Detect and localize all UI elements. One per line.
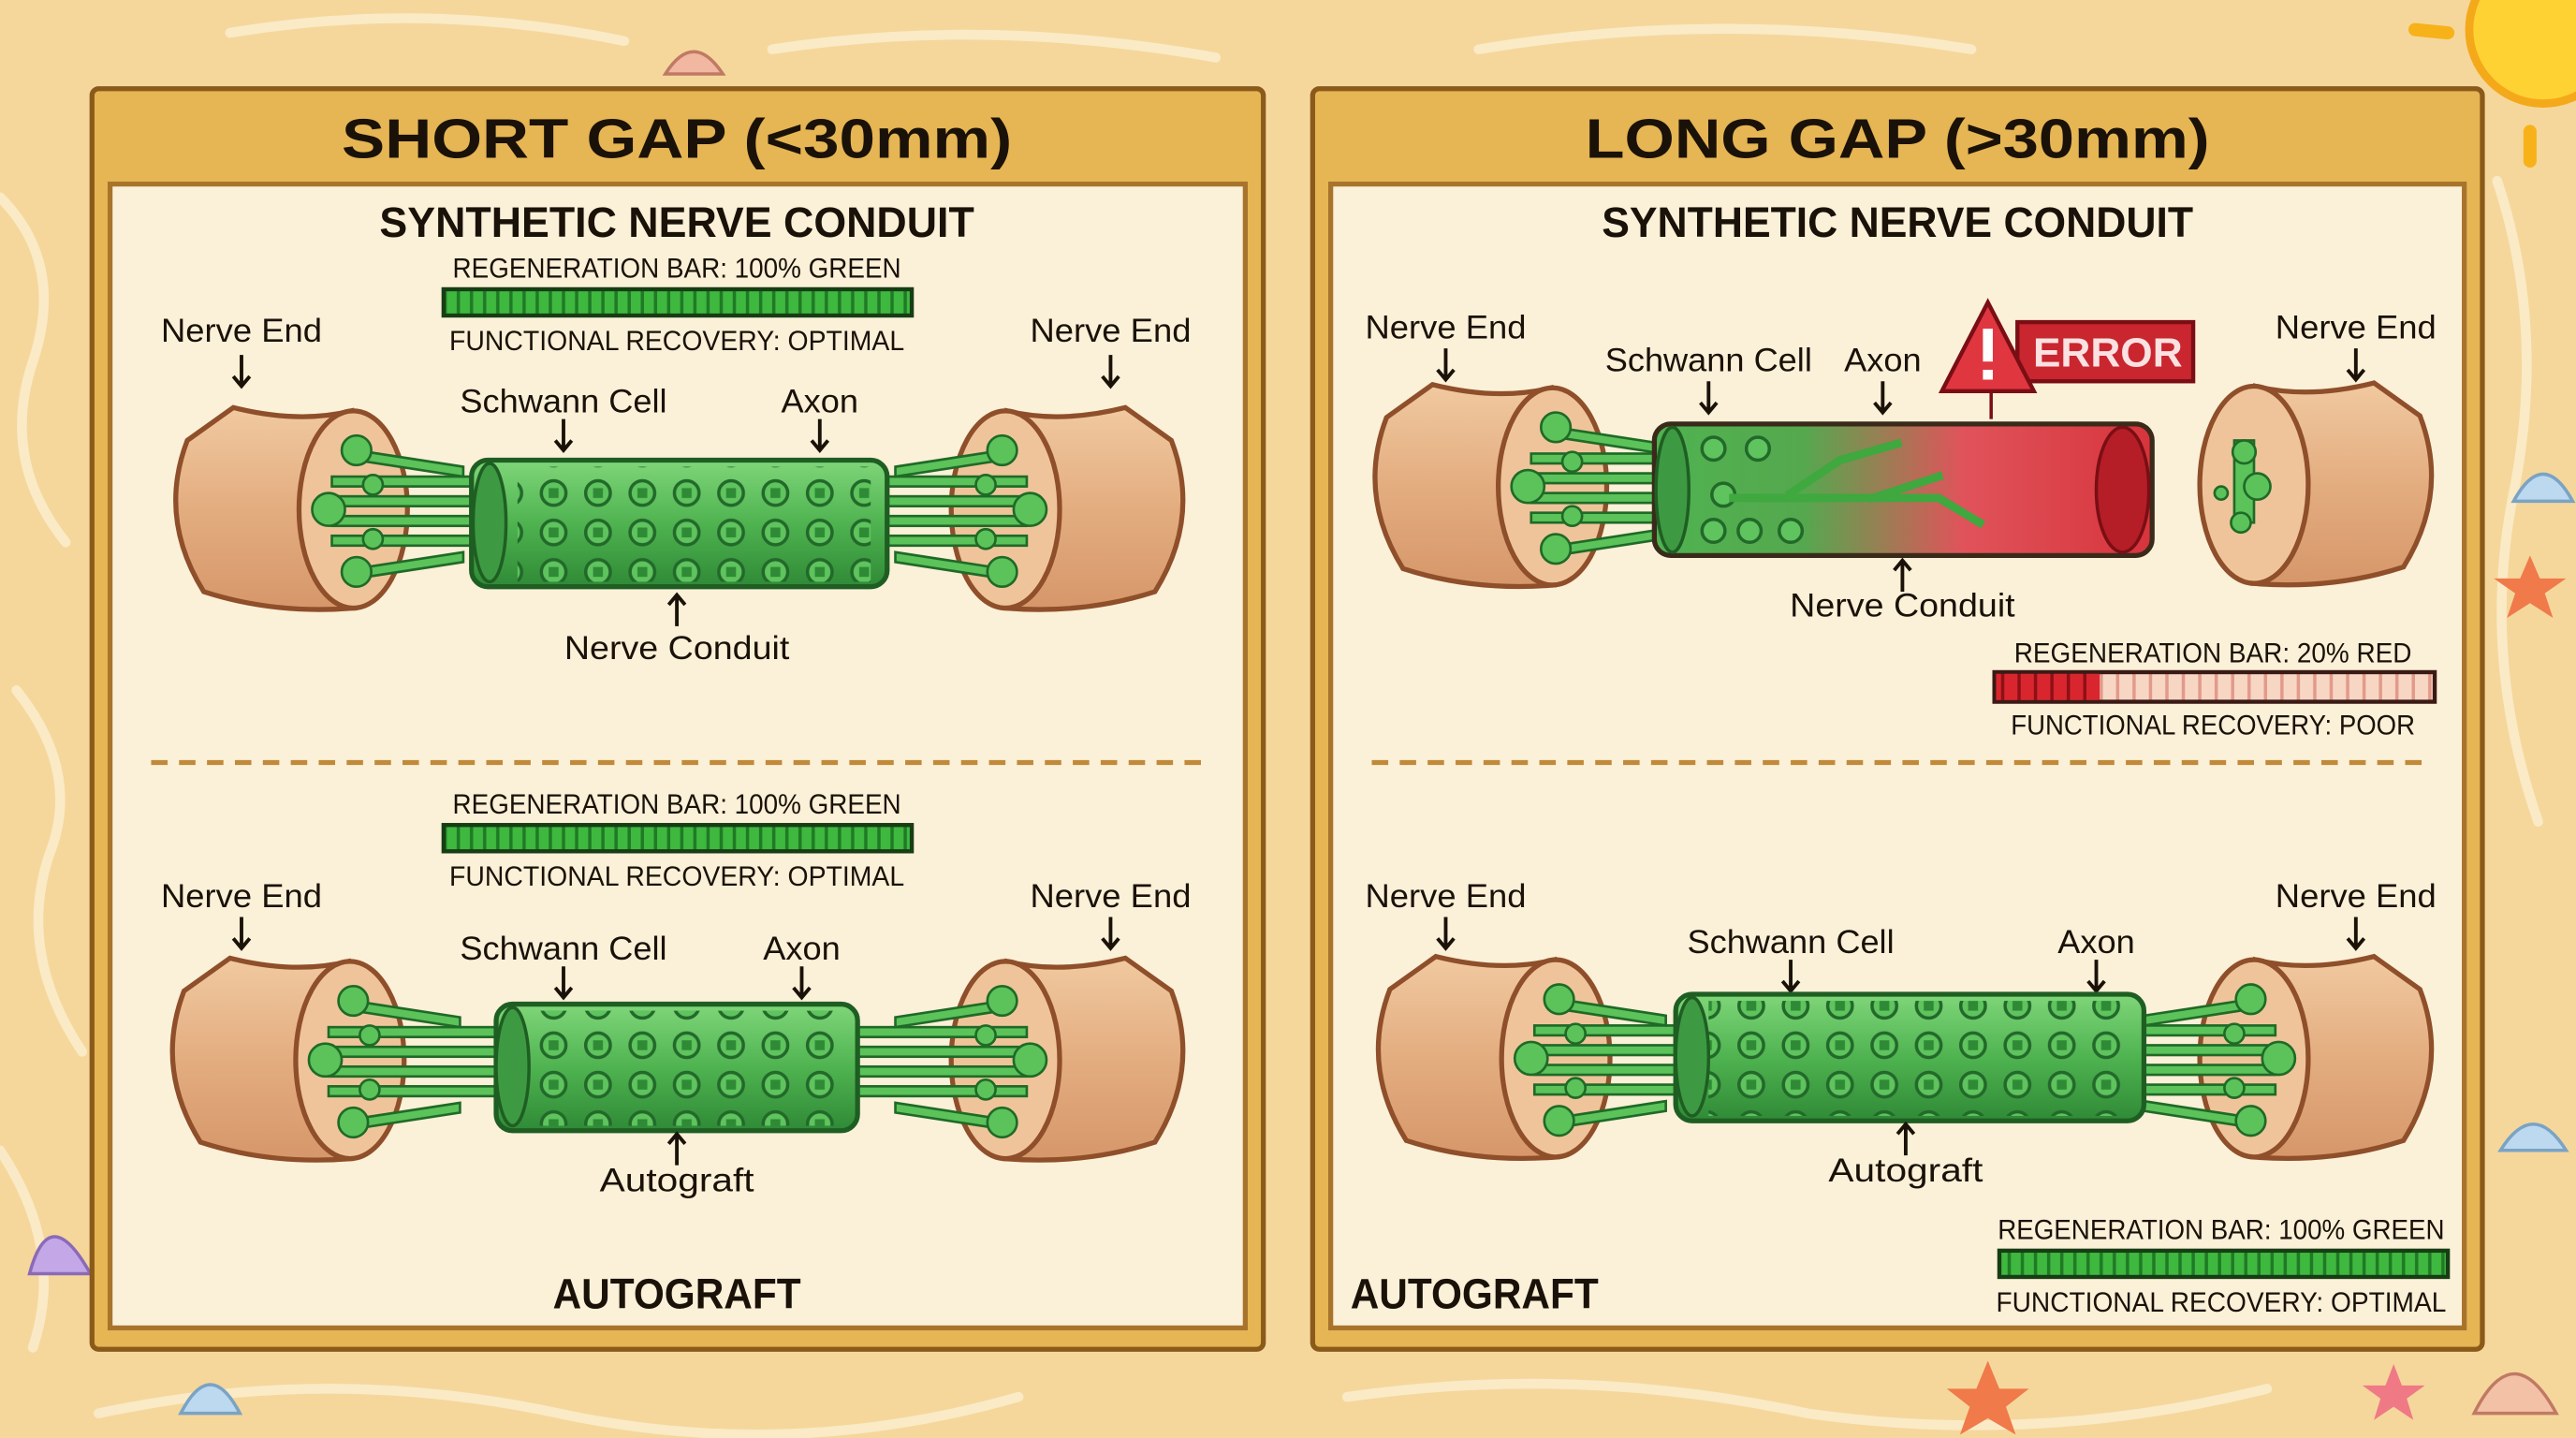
icon: sun: [2415, 0, 2576, 161]
heading: long gap: LONG GAP (>30mm): [1586, 108, 2210, 170]
section: autograft short: Axon: [763, 931, 841, 967]
panel: long gap: [1312, 89, 2482, 1349]
section: synthetic conduit long: Nerve End: [2276, 310, 2437, 346]
section: autograft long: FUNCTIONAL RECOVERY: OPTIMAL: [1996, 1287, 2446, 1318]
section: autograft short: Nerve End: [161, 878, 322, 915]
section: autograft short: FUNCTIONAL RECOVERY: OPTIMAL: [449, 861, 904, 892]
section: synthetic conduit short: [161, 198, 1191, 667]
section: synthetic conduit short: SYNTHETIC NERVE CONDUIT: [379, 198, 974, 246]
section: synthetic conduit short: REGENERATION BAR: 100% GREEN: [453, 254, 901, 285]
section: synthetic conduit long: [1365, 198, 2437, 741]
section: synthetic conduit long: SYNTHETIC NERVE CONDUIT: [1602, 198, 2193, 246]
section: synthetic conduit long: REGENERATION BAR: 20% RED: [2014, 638, 2411, 668]
section: synthetic conduit long: Schwann Cell: [1605, 343, 1812, 379]
section: autograft long: REGENERATION BAR: 100% GREEN: [1998, 1215, 2445, 1246]
section: synthetic conduit short: FUNCTIONAL RECOVERY: OPTIMAL: [449, 326, 904, 357]
section: autograft short: Autograft: [600, 1163, 754, 1199]
section: autograft long: [1351, 878, 2448, 1318]
section: synthetic conduit short: Axon: [782, 384, 858, 420]
section: autograft long: AUTOGRAFT: [1351, 1269, 1599, 1317]
section: autograft long: Axon: [2057, 924, 2135, 961]
section: autograft short: Schwann Cell: [460, 931, 667, 967]
section: autograft long: Schwann Cell: [1687, 924, 1895, 961]
section: synthetic conduit long: Nerve Conduit: [1790, 587, 2015, 624]
section: synthetic conduit short: Nerve End: [161, 313, 322, 349]
section: autograft short: AUTOGRAFT: [553, 1269, 801, 1317]
section: synthetic conduit long: FUNCTIONAL RECOVERY: POOR: [2011, 711, 2415, 741]
section: autograft short: [161, 789, 1191, 1317]
section: autograft long: Nerve End: [2276, 878, 2437, 915]
section: synthetic conduit short: Nerve End: [1030, 313, 1191, 349]
section: synthetic conduit short: Nerve Conduit: [564, 630, 790, 667]
section: autograft long: Nerve End: [1365, 878, 1526, 915]
callout: error: ERROR: [2033, 330, 2183, 375]
panel: short gap: [92, 89, 1264, 1349]
section: autograft short: REGENERATION BAR: 100% GREEN: [453, 789, 901, 820]
section: synthetic conduit short: Schwann Cell: [460, 384, 667, 420]
section: synthetic conduit long: Nerve End: [1365, 310, 1526, 346]
callout: error: [1942, 302, 2193, 419]
section: autograft long: Autograft: [1828, 1152, 1983, 1189]
section: autograft short: Nerve End: [1030, 878, 1191, 915]
section: synthetic conduit long: Axon: [1844, 343, 1922, 379]
heading: short gap: SHORT GAP (<30mm): [342, 108, 1012, 170]
